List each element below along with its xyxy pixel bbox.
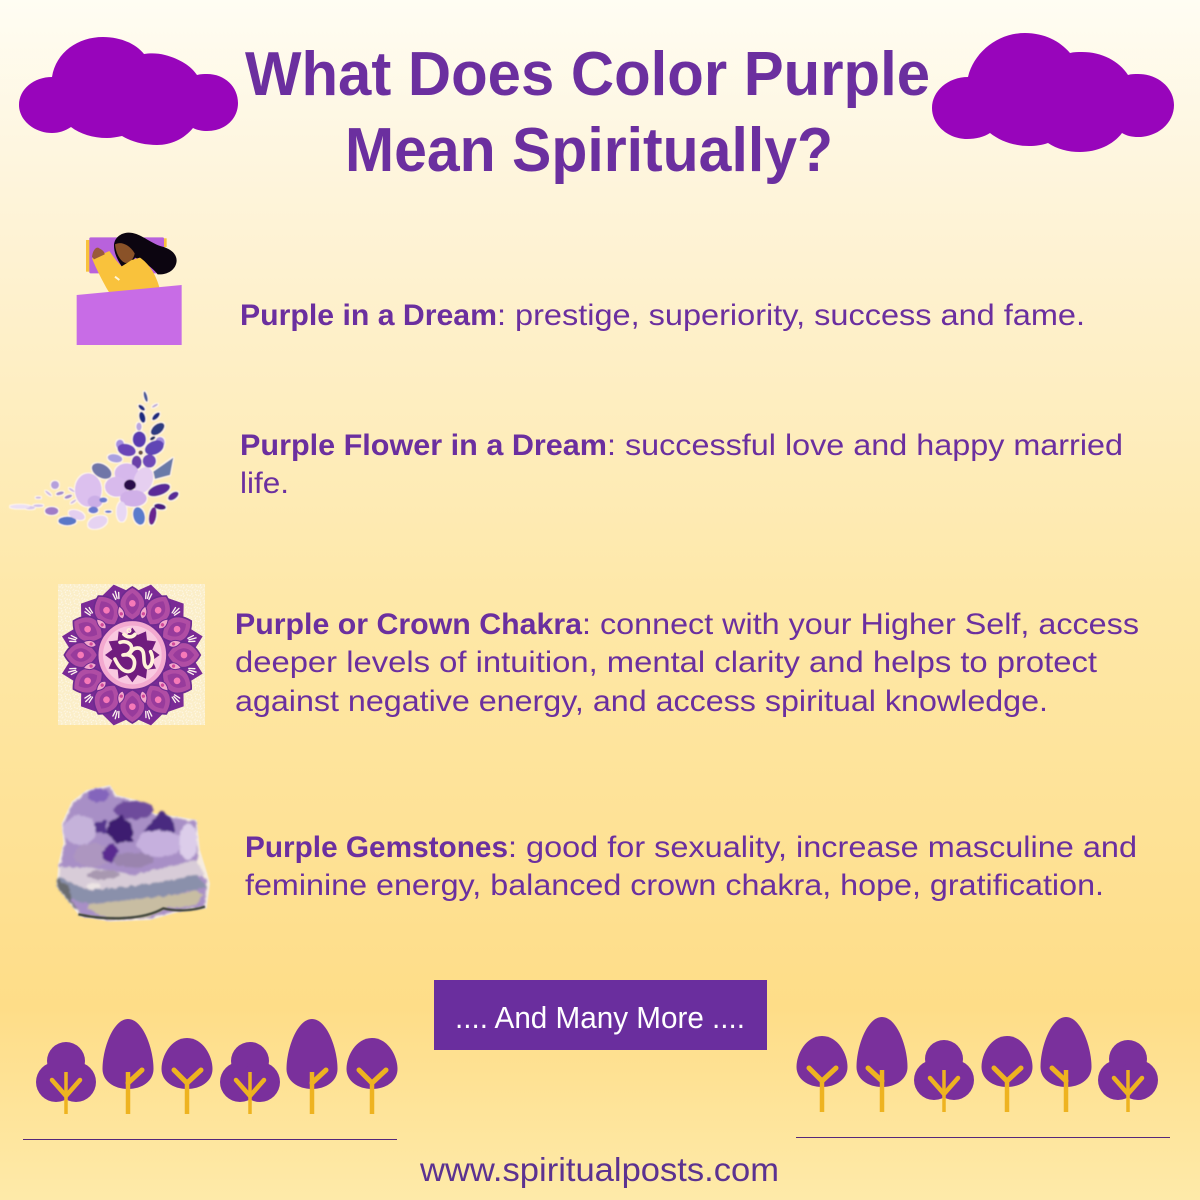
trees: left group	[36, 1019, 398, 1114]
cloud: top right	[932, 33, 1174, 152]
title: What Does Color Purple	[245, 40, 930, 109]
cloud: top left	[19, 37, 238, 145]
icon: purple flower bouquet	[10, 391, 180, 531]
icon: amethyst gemstone	[57, 785, 210, 922]
text: purple flower in a dream: Purple Flower in a Dream	[240, 429, 607, 462]
text: purple or crown chakra: : connect with your Higher Self, access	[582, 608, 1139, 641]
text: purple in a dream: : prestige, superiority, success and fame.	[497, 299, 1085, 332]
text: purple or crown chakra: against negative energy, and access spiritual knowledge.	[235, 685, 1048, 718]
icon: woman sleeping	[77, 233, 182, 345]
button: and many more	[434, 980, 767, 1050]
icon: om symbol	[115, 630, 152, 671]
text: purple in a dream	[240, 299, 1085, 332]
text: purple gemstones	[245, 831, 1137, 902]
icon: blanket	[77, 285, 182, 345]
text: purple flower in a dream: life.	[240, 467, 289, 500]
text: purple gemstones: : good for sexuality, increase masculine and	[508, 831, 1137, 864]
trees: right group	[796, 1017, 1158, 1112]
text: purple or crown chakra: Purple or Crown Chakra	[235, 608, 582, 641]
text: purple flower in a dream: : successful love and happy married	[607, 429, 1123, 462]
text: purple or crown chakra: deeper levels of intuition, mental clarity and helps to protect	[235, 646, 1098, 679]
text: purple gemstones: feminine energy, balanced crown chakra, hope, gratification.	[245, 869, 1104, 902]
text: purple in a dream: Purple in a Dream	[240, 299, 497, 332]
website url: www.spiritualposts.com	[419, 1151, 779, 1188]
button: and many more: .... And Many More ....	[455, 1000, 745, 1035]
title: Mean Spiritually?	[345, 116, 833, 185]
text: purple or crown chakra	[235, 608, 1139, 718]
icon: crown chakra mandala	[58, 584, 205, 725]
text: purple flower in a dream	[240, 429, 1123, 500]
text: purple gemstones: Purple Gemstones	[245, 831, 508, 864]
title	[245, 40, 930, 185]
